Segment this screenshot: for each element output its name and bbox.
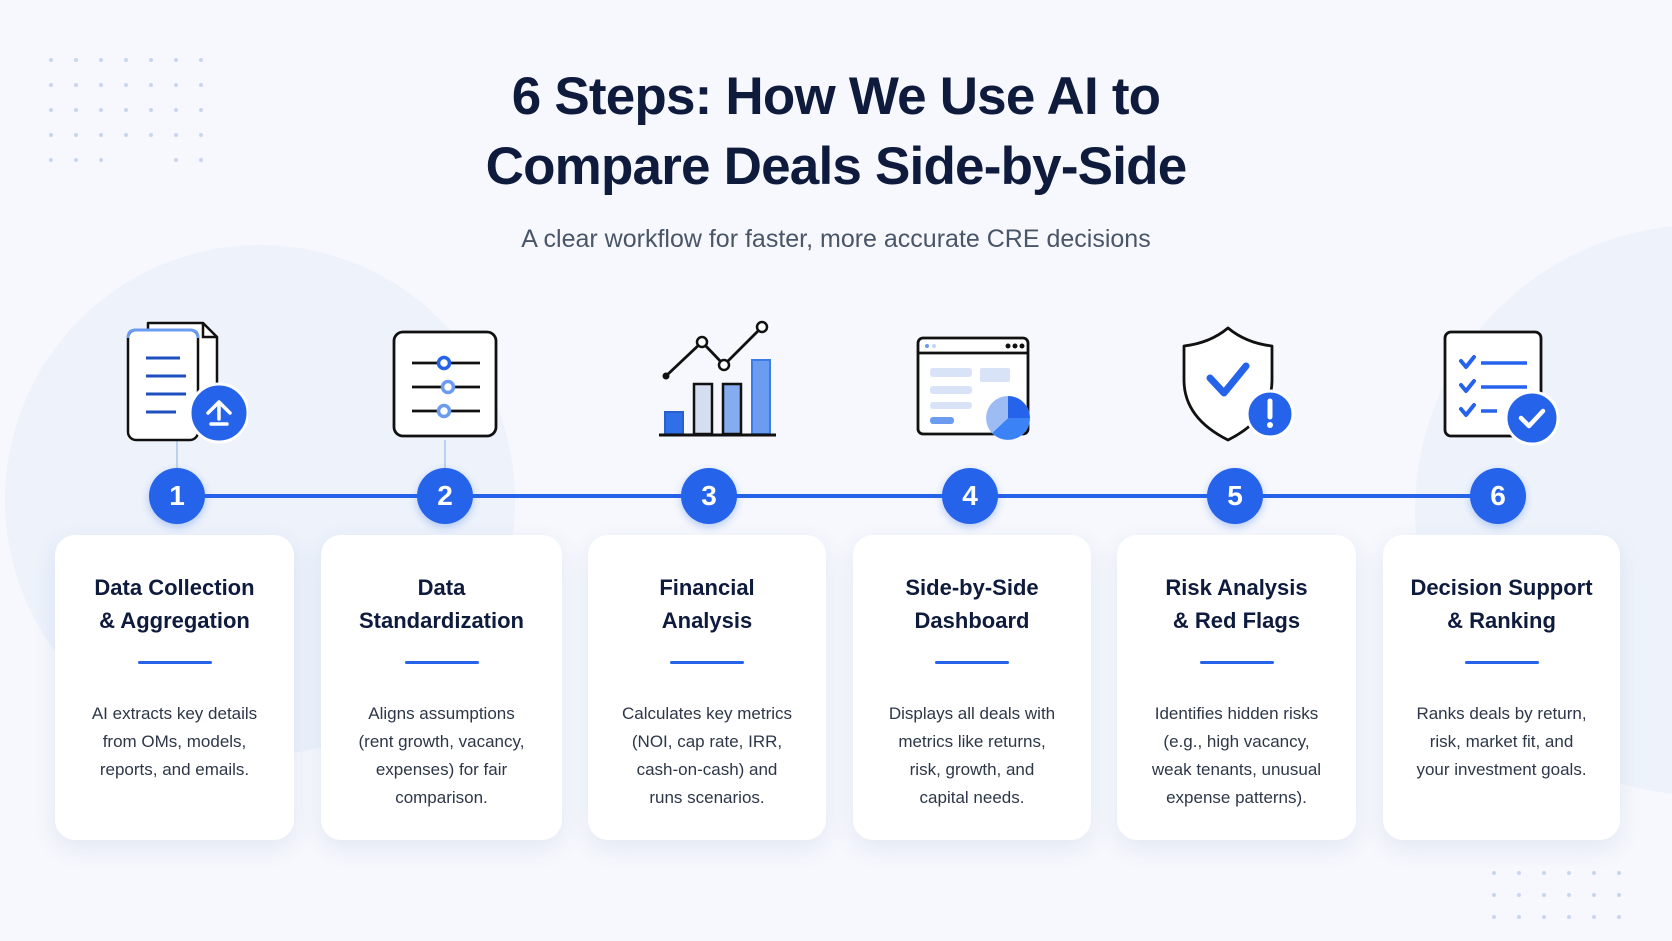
card 2: expenses) for fair [376,760,507,779]
card 2: comparison. [395,788,488,807]
step number 4: 4 [962,480,978,511]
card 2: Aligns assumptions [368,704,515,723]
card 3: runs scenarios. [649,788,765,807]
card 5: & Red Flags [1173,608,1300,633]
card 4: Side-by-Side [905,575,1039,600]
step number 2: 2 [437,480,453,511]
icon: documents upload [126,322,248,444]
step number 3: 3 [701,480,717,511]
card 6 [1383,535,1620,840]
card 1: & Aggregation [99,608,250,633]
card 1: reports, and emails. [100,760,249,779]
card 6: & Ranking [1447,608,1556,633]
card 4: metrics like returns, [898,732,1046,751]
card 5: expense patterns). [1166,788,1307,807]
icon: checklist [1444,330,1560,446]
step number 5 [1207,468,1263,524]
step number 1: 1 [169,480,185,511]
step number 1 [149,468,205,524]
card 1: from OMs, models, [103,732,246,751]
title [486,67,1186,196]
connector lines [176,440,178,470]
icon: bar chart [659,320,776,436]
card 4: capital needs. [920,788,1024,807]
decorative dots top-left [49,58,203,162]
step number 3 [681,468,737,524]
title: 6 Steps: How We Use AI to [512,67,1160,126]
icon: dashboard [916,336,1030,440]
card 2: Data [418,575,465,600]
title: Compare Deals Side-by-Side [486,137,1186,196]
timeline line [177,494,1498,498]
card 6: Ranks deals by return, [1416,704,1587,723]
card 2: Standardization [359,608,524,633]
card 6: your investment goals. [1416,760,1587,779]
card 5: Identifies hidden risks [1155,704,1318,723]
card 4: risk, growth, and [910,760,1034,779]
step number 6: 6 [1490,480,1506,511]
step number 5: 5 [1227,480,1243,511]
step number 6 [1470,468,1526,524]
step number 4 [942,468,998,524]
card 6: Decision Support [1410,575,1593,600]
card 5: weak tenants, unusual [1152,760,1321,779]
card 5 [1117,535,1356,840]
card 3: cash-on-cash) and [637,760,777,779]
card 4: Dashboard [915,608,1029,633]
card 3 [588,535,826,840]
card 4: Displays all deals with [889,704,1055,723]
card 1 [55,535,294,840]
card 1: Data Collection [94,575,255,600]
card 3: Calculates key metrics [622,704,792,723]
card 5: Risk Analysis [1165,575,1308,600]
card 3: Analysis [662,608,752,633]
subtitle: A clear workflow for faster, more accurate CRE decisions [521,225,1151,253]
card 2 [321,535,562,840]
card 6: risk, market fit, and [1430,732,1573,751]
card 1: AI extracts key details [92,704,257,723]
icon: shield [1182,326,1294,442]
icon: sliders [392,330,498,438]
card 3: (NOI, cap rate, IRR, [632,732,782,751]
card 4 [853,535,1091,840]
card 3: Financial [659,575,755,600]
card 2: (rent growth, vacancy, [358,732,524,751]
step number 2 [417,468,473,524]
decorative dots bottom-right [1492,871,1621,919]
card 5: (e.g., high vacancy, [1163,732,1310,751]
